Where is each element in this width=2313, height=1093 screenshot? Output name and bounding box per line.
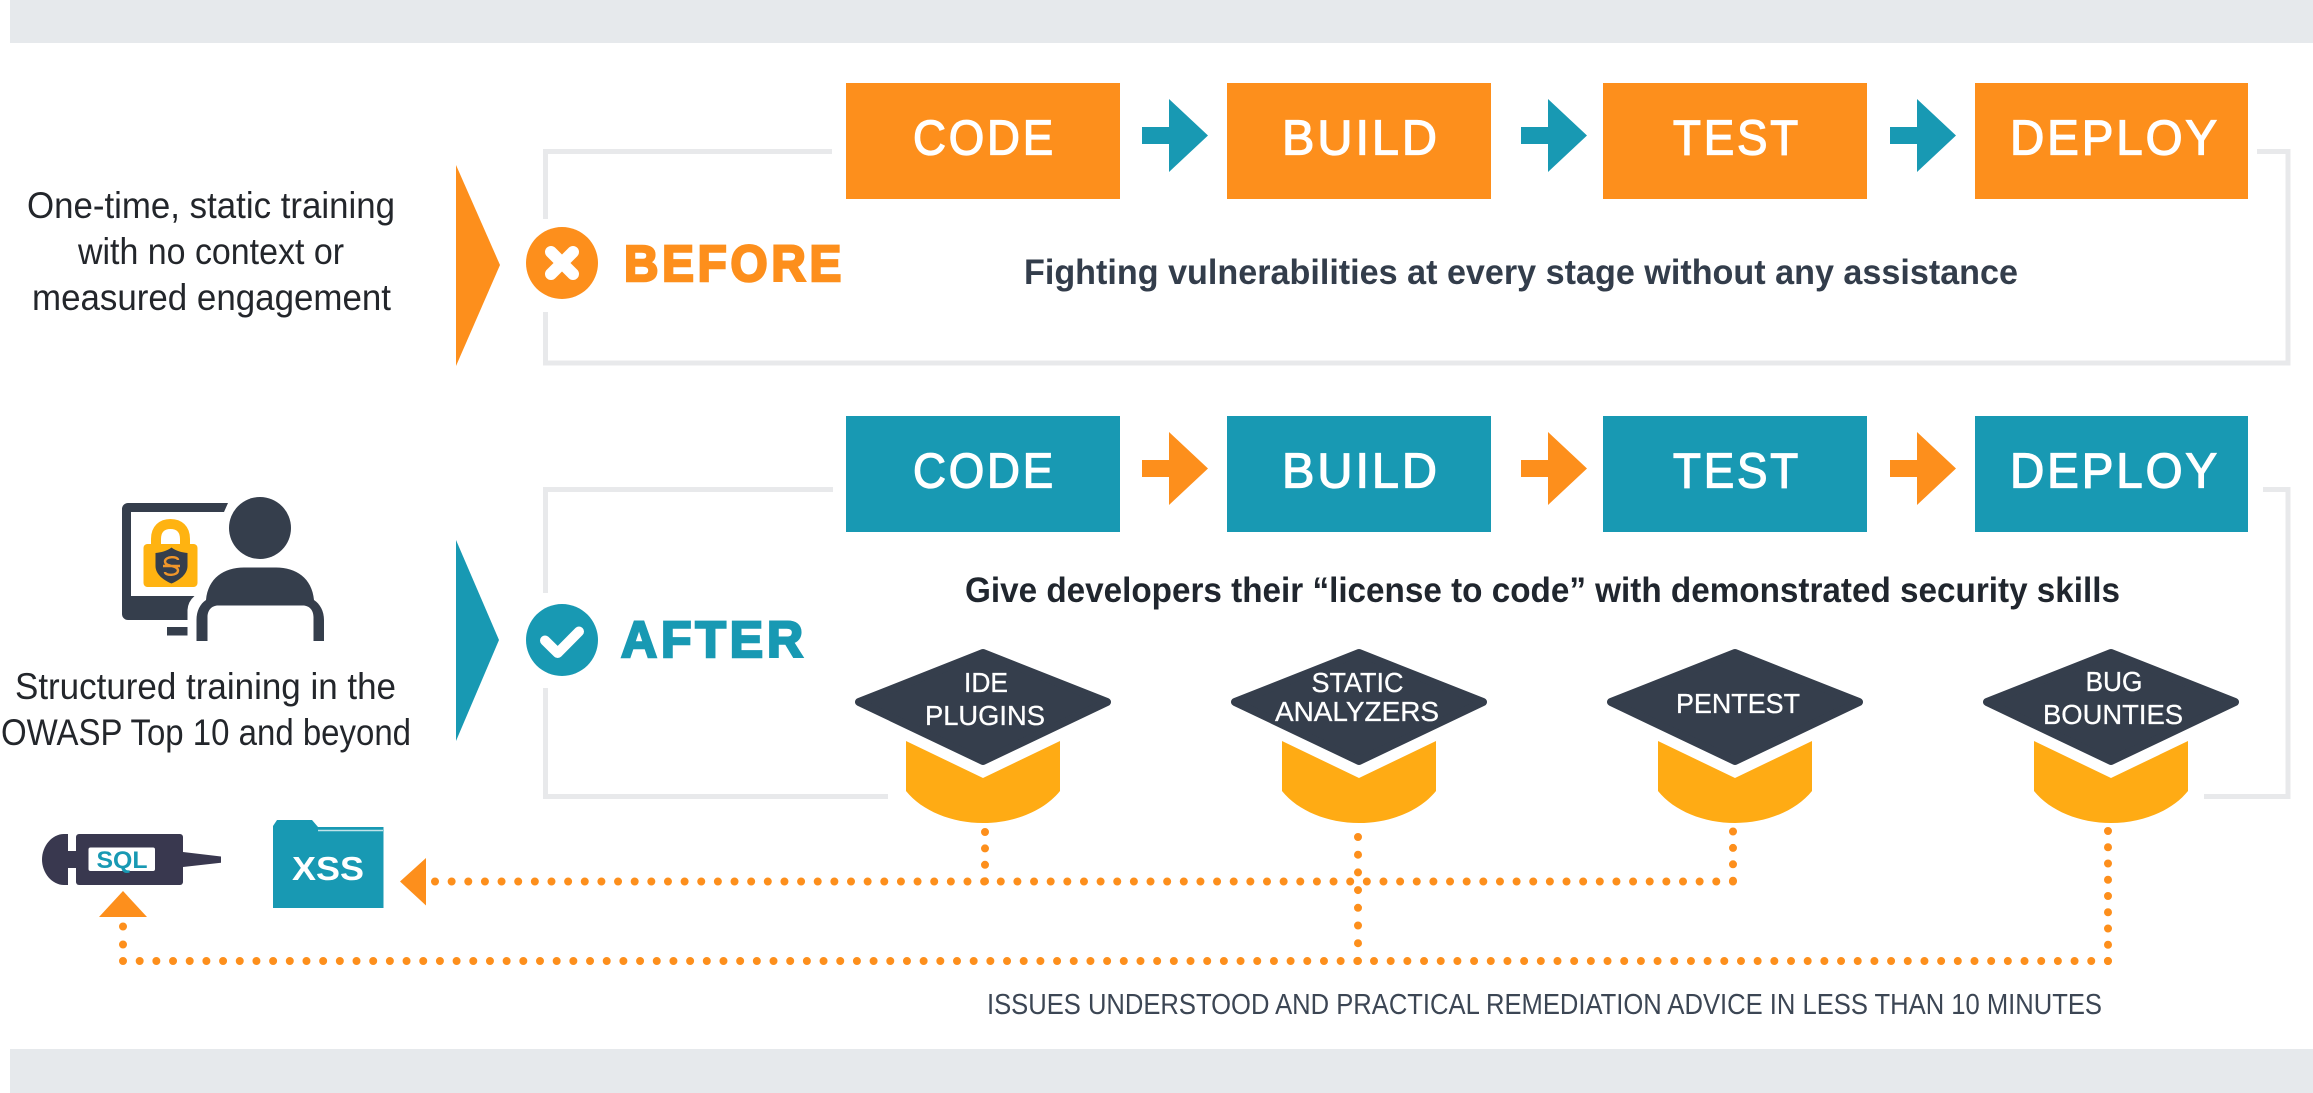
stage: code <box>846 416 1120 532</box>
stage: deploy <box>1975 83 2248 199</box>
after pointer triangle <box>456 540 499 741</box>
panel: before row <box>27 83 2288 366</box>
stage: build: BUILD <box>1282 112 1440 166</box>
icon: graduation cap, bug bounties <box>1987 653 2235 823</box>
stage: deploy: DEPLOY <box>2010 444 2220 498</box>
icon: after check circle <box>526 604 598 676</box>
icon: graduation cap, static analyzers: STATIC <box>1312 667 1404 698</box>
stage: test: TEST <box>1673 112 1801 166</box>
icon: developer at monitor <box>122 497 324 641</box>
stage: deploy <box>1975 416 2248 532</box>
stage: test <box>1603 416 1867 532</box>
panel: after row <box>1 416 2288 823</box>
icon: XSS folder: XSS <box>292 850 364 887</box>
stage: deploy: DEPLOY <box>2010 112 2220 166</box>
arrow: code to build <box>1142 432 1208 505</box>
before pointer triangle <box>456 165 500 366</box>
icon: graduation cap, static analyzers: ANALYZERS <box>1275 696 1439 727</box>
arrow: build to test <box>1521 99 1587 172</box>
before left description: One-time, static training <box>27 185 395 226</box>
before left description: with no context or <box>77 231 344 272</box>
icon: padlock <box>144 524 198 587</box>
icon: graduation cap, static analyzers <box>1235 653 1483 823</box>
icon: XSS folder <box>273 820 384 908</box>
icon: graduation cap, pentest: PENTEST <box>1676 688 1800 719</box>
after left description: Structured training in the <box>15 666 396 707</box>
after left description <box>1 666 411 753</box>
stage: code: CODE <box>913 444 1056 498</box>
stage: code <box>846 83 1120 199</box>
before left description <box>27 185 395 318</box>
icon: before x circle <box>526 227 598 299</box>
stage: test <box>1603 83 1867 199</box>
arrow: into SQL syringe <box>99 891 147 917</box>
arrow: test to deploy <box>1890 99 1956 172</box>
stage: build <box>1227 416 1491 532</box>
stage: build <box>1227 83 1491 199</box>
stage: test: TEST <box>1673 444 1801 498</box>
icon: graduation cap, IDE plugins: IDE <box>964 667 1008 698</box>
icon: graduation cap, bug bounties: BOUNTIES <box>2043 699 2183 730</box>
after caption: Give developers their “license to code” with demonstrated security skills <box>965 571 2120 610</box>
icon: SQL syringe: SQL <box>96 847 148 874</box>
arrow: code to build <box>1142 99 1208 172</box>
arrow: build to test <box>1521 432 1587 505</box>
stage: code: CODE <box>913 112 1056 166</box>
icon: graduation cap, pentest <box>1611 653 1859 823</box>
before left description: measured engagement <box>32 277 392 318</box>
before label: BEFORE <box>624 235 845 292</box>
arrow: test to deploy <box>1890 432 1956 505</box>
arrow: into XSS folder <box>400 858 426 906</box>
icon: graduation cap, IDE plugins <box>859 653 1107 823</box>
icon: graduation cap, bug bounties: BUG <box>2086 666 2142 697</box>
before caption: Fighting vulnerabilities at every stage without any assistance <box>1024 253 2018 292</box>
after label: AFTER <box>621 611 807 668</box>
icon: SQL syringe <box>42 834 221 885</box>
after left description: OWASP Top 10 and beyond <box>1 712 411 753</box>
icon: graduation cap, IDE plugins: PLUGINS <box>925 700 1045 731</box>
footer note: ISSUES UNDERSTOOD AND PRACTICAL REMEDIATION ADVICE IN LESS THAN 10 MINUTES <box>987 989 2102 1021</box>
dotted feedback lines <box>123 831 2108 962</box>
stage: build: BUILD <box>1282 444 1440 498</box>
